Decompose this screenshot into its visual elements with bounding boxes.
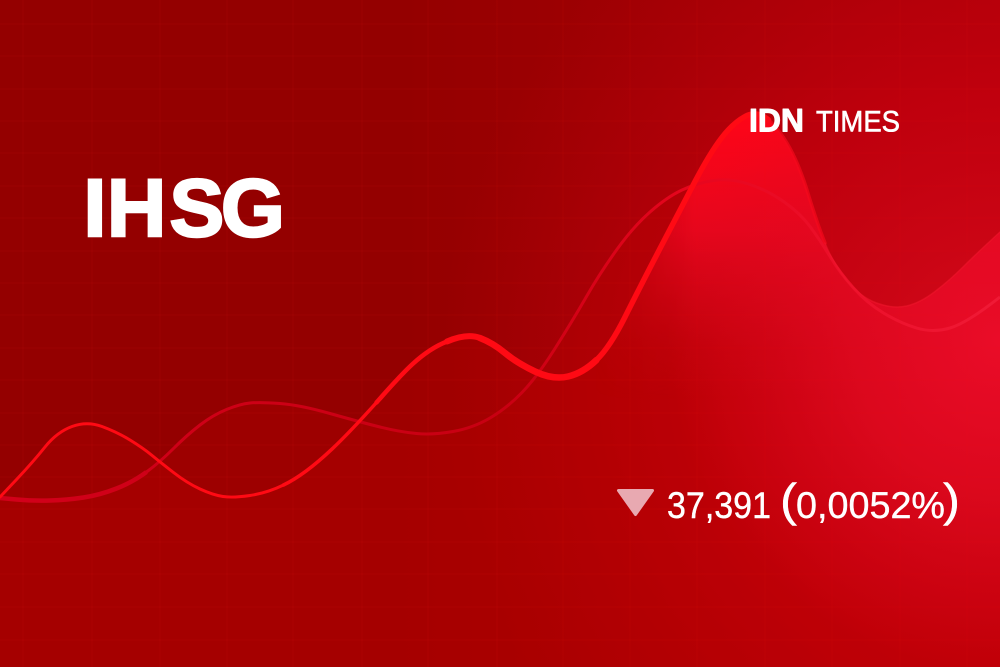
area under secondary curve bbox=[0, 180, 1000, 667]
value: index change: ( bbox=[780, 474, 798, 526]
title: IHSG bbox=[84, 163, 285, 254]
value: index change: ) bbox=[943, 474, 960, 526]
area: chart peak bbox=[635, 116, 840, 332]
logo: IDN Times bbox=[749, 102, 900, 139]
secondary curve bbox=[0, 180, 1000, 501]
icon: down triangle bbox=[618, 490, 652, 514]
value: index change: 0,0052% bbox=[796, 485, 945, 526]
main curve bbox=[0, 114, 1000, 497]
area: right edge glow bbox=[596, 114, 1000, 667]
value: index change bbox=[667, 474, 960, 526]
value: index change: 37,391 bbox=[667, 485, 771, 526]
logo: IDN Times: TIMES bbox=[816, 106, 900, 139]
logo: IDN Times: IDN bbox=[749, 102, 804, 138]
